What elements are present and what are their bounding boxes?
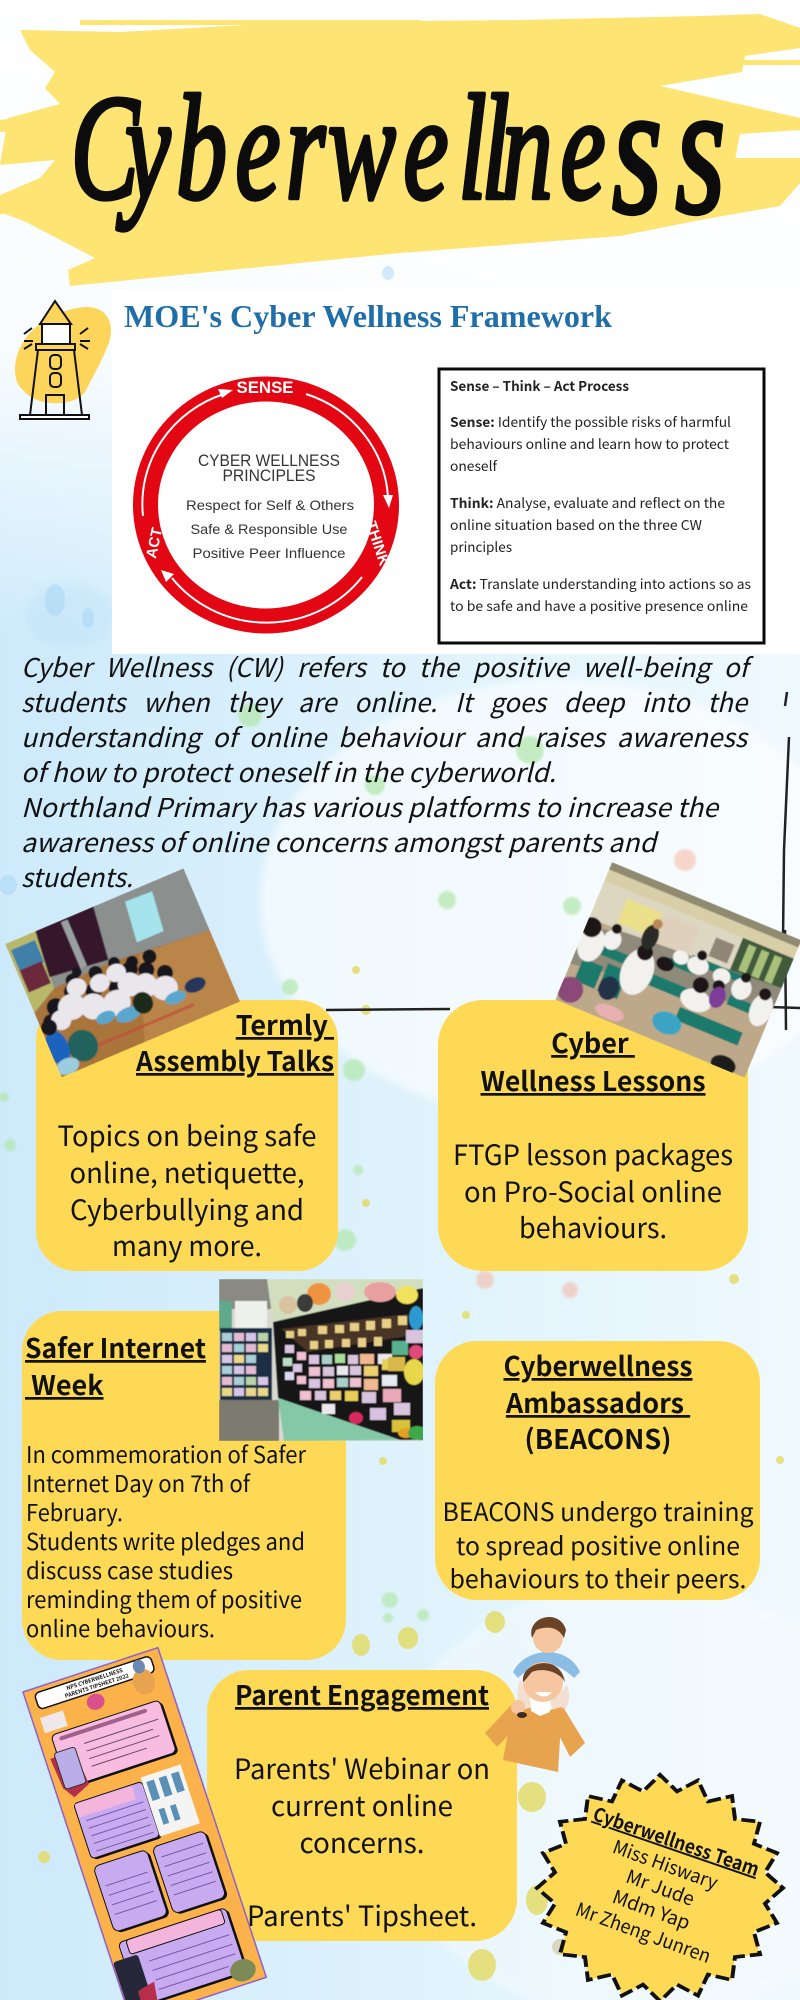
- panel: safer internet week: Internet Day on 7th of: [26, 1465, 251, 1499]
- principles text: Positive Peer Influence: [192, 545, 346, 561]
- panel: cyber wellness lessons: Cyber: [551, 1022, 635, 1061]
- framework heading: MOE's Cyber Wellness Framework: [124, 298, 612, 334]
- father sweater: [503, 1707, 562, 1772]
- principles text: [186, 451, 354, 561]
- yellow blob behind lighthouse: [15, 307, 111, 403]
- panel: safer internet week: discuss case studies: [26, 1552, 233, 1586]
- panel: termly assembly talks: Termly: [236, 1004, 334, 1043]
- intro paragraph: Cyber Wellness (CW) refers to the positive well-being of: [21, 648, 755, 685]
- panel: safer internet week: Safer Internet: [25, 1327, 206, 1366]
- white framework panel: [112, 290, 800, 654]
- decorative scribble line: [326, 692, 800, 1030]
- panel: cyberwellness ambassadors: Ambassadors: [505, 1382, 690, 1421]
- panel: termly assembly talks: [36, 1000, 338, 1271]
- sense think act process box: oneself: [450, 455, 498, 475]
- panel: cyber wellness lessons: [438, 1000, 748, 1271]
- red principles ring: SENSE: [236, 378, 294, 397]
- panel: cyberwellness ambassadors: (BEACONS): [525, 1418, 671, 1457]
- panel: cyber wellness lessons: on Pro-Social online: [464, 1171, 722, 1211]
- tipsheet header: NPS CYBERWELLNESS: [65, 1666, 124, 1692]
- child arms: [513, 1652, 580, 1678]
- tipsheet header: PARENTS TIPSHEET 2022: [64, 1671, 130, 1700]
- panel: cyberwellness ambassadors: [435, 1341, 760, 1600]
- badge: cyberwellness team: Mr Zheng Junren: [572, 1895, 715, 1969]
- principles text: Safe & Responsible Use: [190, 521, 348, 537]
- panel: parent engagement: current online: [271, 1785, 453, 1825]
- sense think act process box: [439, 369, 764, 643]
- red principles ring: THINK: [362, 519, 392, 568]
- panel: termly assembly talks: online, netiquette,: [70, 1152, 304, 1192]
- badge: cyberwellness team: Mr Jude: [623, 1862, 699, 1912]
- panel: cyber wellness lessons: Wellness Lessons: [480, 1060, 706, 1099]
- panel: safer internet week: Students write pledges and: [26, 1523, 305, 1557]
- panel: safer internet week: [22, 1311, 346, 1660]
- sense think act process box: Sense – Think – Act Process: [450, 375, 629, 395]
- principles text: PRINCIPLES: [222, 466, 316, 485]
- top yellow brush stroke banner: [0, 14, 800, 286]
- badge: cyberwellness team: Mdm Yap: [609, 1882, 694, 1935]
- hands and shoes: [511, 1700, 525, 1714]
- tipsheet header: [34, 1656, 155, 1710]
- panel: safer internet week: Week: [25, 1364, 104, 1403]
- sense think act process box: Think: Analyse, evaluate and reflect on the: [450, 492, 725, 512]
- photo: classroom lesson: [550, 860, 800, 1082]
- intro paragraph: students when they are online. It goes deep into the: [21, 683, 750, 720]
- panel: cyber wellness lessons: FTGP lesson packages: [453, 1134, 733, 1174]
- sense think act process box: Sense: Identify the possible risks of harmful: [450, 411, 731, 431]
- icon: lighthouse: [20, 301, 90, 419]
- panel: parent engagement: [207, 1670, 517, 1941]
- photo: assembly talk in hall: [2, 868, 240, 1079]
- intro paragraph: [21, 648, 755, 895]
- red principles ring: ACT: [143, 526, 166, 560]
- badge: cyberwellness team: Miss Hiswary: [609, 1832, 722, 1895]
- child head: [533, 1623, 563, 1653]
- title: ss: [612, 44, 726, 254]
- panel: cyberwellness ambassadors: BEACONS undergo training: [442, 1493, 754, 1529]
- title: Cyberwellne: [71, 65, 606, 231]
- intro paragraph: awareness of online concerns amongst parents and: [21, 823, 659, 860]
- panel: termly assembly talks: many more.: [112, 1225, 262, 1265]
- panel: cyber wellness lessons: behaviours.: [519, 1207, 667, 1247]
- panel: termly assembly talks: Cyberbullying and: [70, 1189, 304, 1229]
- sense think act process box: Act: Translate understanding into actions so as: [449, 573, 751, 593]
- red principles ring: [142, 378, 393, 623]
- panel: safer internet week: In commemoration of Safer: [26, 1436, 306, 1470]
- sense think act process box: to be safe and have a positive presence online: [450, 595, 748, 615]
- panel: termly assembly talks: Assembly Talks: [135, 1040, 334, 1079]
- panel: cyberwellness ambassadors: Cyberwellness: [504, 1345, 692, 1384]
- badge: cyberwellness team: Cyberwellness Team: [590, 1800, 763, 1882]
- father arms: [485, 1702, 520, 1747]
- badge: cyberwellness team: [537, 1775, 783, 2000]
- panel: parent engagement: Parent Engagement: [235, 1674, 489, 1713]
- sense think act process box: online situation based on the three CW: [450, 514, 702, 534]
- principles text: Respect for Self & Others: [186, 497, 354, 513]
- intro paragraph: understanding of online behaviour and raises awareness: [21, 718, 750, 755]
- panel: safer internet week: reminding them of positive: [26, 1581, 302, 1615]
- sense think act process box: principles: [450, 536, 512, 556]
- principles text: CYBER WELLNESS: [198, 451, 340, 470]
- panel: cyberwellness ambassadors: behaviours to their peers.: [450, 1560, 746, 1596]
- panel: parent engagement: Parents' Webinar on: [234, 1748, 490, 1788]
- father collar: [530, 1698, 550, 1716]
- intro paragraph: of how to protect oneself in the cyberworld.: [21, 753, 556, 790]
- panel: termly assembly talks: Topics on being safe: [58, 1115, 316, 1155]
- intro paragraph: students.: [21, 858, 133, 895]
- photo: pledge wall: [219, 1279, 426, 1441]
- title: [71, 44, 726, 254]
- panel: parent engagement: concerns.: [300, 1822, 424, 1862]
- intro paragraph: Northland Primary has various platforms to increase the: [21, 788, 721, 825]
- photo: parents tipsheet poster: [23, 1648, 266, 2000]
- panel: parent engagement: Parents' Tipsheet.: [247, 1895, 477, 1935]
- child legs: [517, 1680, 569, 1718]
- sense think act process box: behaviours online and learn how to protect: [450, 433, 729, 453]
- icon: parent carrying child: [485, 1617, 585, 1772]
- panel: safer internet week: February.: [26, 1494, 123, 1528]
- father head: [523, 1662, 563, 1702]
- panel: safer internet week: online behaviours.: [26, 1610, 215, 1644]
- panel: cyberwellness ambassadors: to spread positive online: [456, 1527, 740, 1563]
